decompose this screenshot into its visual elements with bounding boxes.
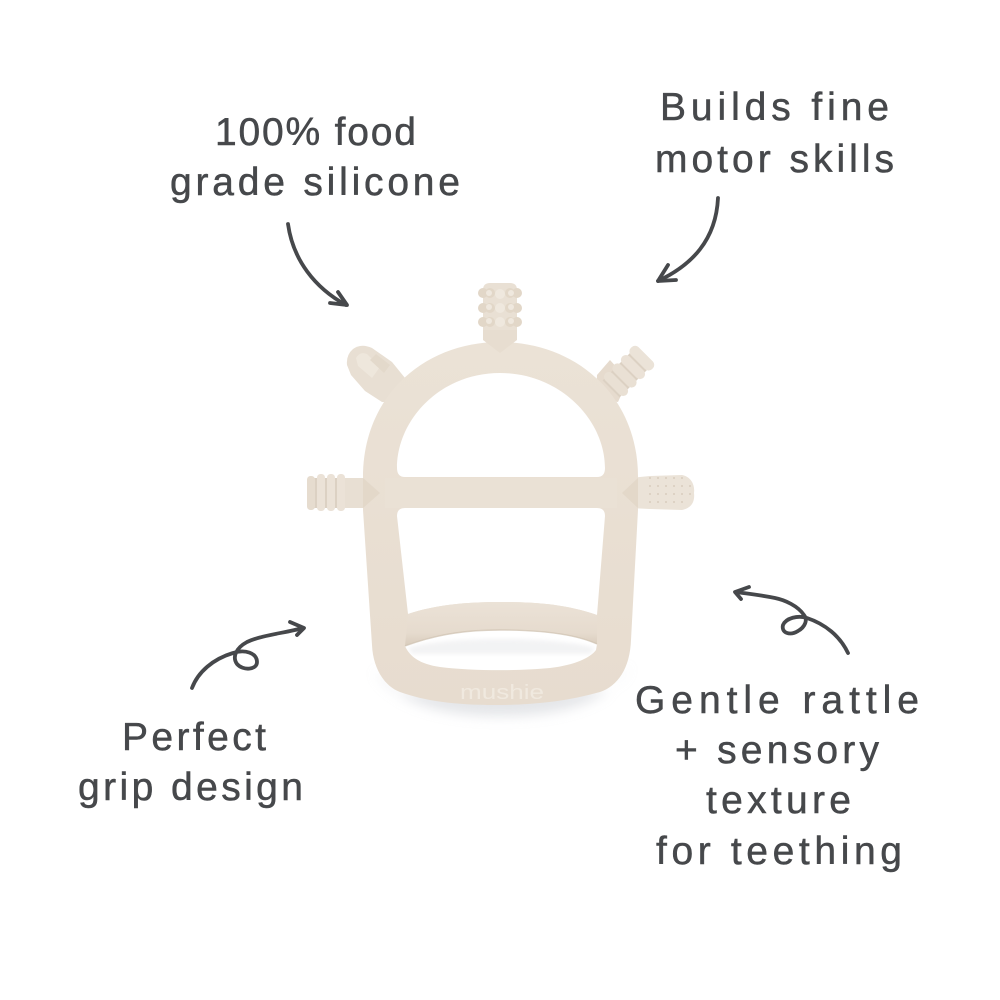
teether product: [307, 283, 694, 716]
teether body: [363, 342, 638, 705]
left horizontal ribbed nub: [307, 474, 370, 511]
label: perfect grip design: [78, 716, 303, 809]
shadow in ring opening: [408, 639, 595, 654]
label: gentle rattle + sensory texture for teething: texture: [706, 779, 851, 822]
arrow: looped toward grip: [192, 622, 304, 688]
label: perfect grip design: grip design: [78, 766, 303, 809]
label: gentle rattle + sensory texture for teething: [635, 679, 919, 873]
back ring band: [405, 602, 597, 646]
ground shadow: [375, 665, 630, 716]
junction shading: [363, 478, 638, 508]
label: builds fine motor skills: [655, 86, 894, 181]
label: 100% food grade silicone: 100% food: [215, 111, 416, 154]
label: builds fine motor skills: motor skills: [655, 138, 894, 181]
arrow: looped toward rattle: [735, 587, 848, 653]
ring inner edge shade: [405, 630, 597, 646]
label: gentle rattle + sensory texture for teething: + sensory: [675, 729, 880, 772]
label: 100% food grade silicone: grade silicone: [170, 161, 460, 204]
crossbar: [385, 478, 617, 508]
label: 100% food grade silicone: [170, 111, 460, 204]
label: perfect grip design: Perfect: [122, 716, 266, 759]
embossed logo: mushie: mushie: [460, 682, 544, 704]
upper-right ribbed nub: [596, 344, 656, 402]
arrow: to top-left of teether: [288, 224, 347, 305]
chevron under top nub: [483, 330, 517, 353]
right horizontal textured nub: [630, 475, 694, 510]
arrow: to top-right of teether: [658, 198, 718, 281]
label: gentle rattle + sensory texture for teething: for teething: [656, 830, 902, 873]
top bumpy nub: [478, 283, 522, 333]
label: builds fine motor skills: Builds fine: [660, 86, 889, 129]
upper-left chunky nub: [347, 346, 405, 402]
label: gentle rattle + sensory texture for teething: Gentle rattle: [635, 679, 919, 722]
